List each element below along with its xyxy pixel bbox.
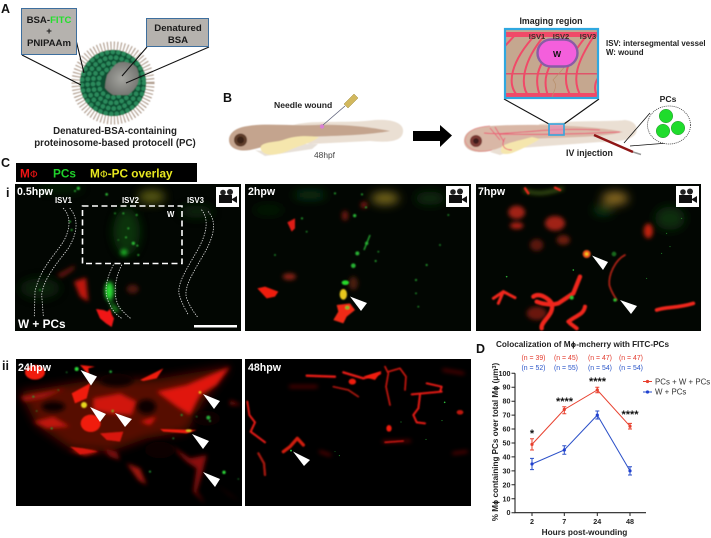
callout: Denatured BSA xyxy=(122,18,209,83)
axes: 10 xyxy=(502,494,510,503)
panel text: W + PCs xyxy=(18,317,66,331)
protocell sphere xyxy=(76,46,150,120)
imaging region box: W xyxy=(553,49,562,59)
panel: D line chart xyxy=(491,340,710,537)
callout: BSA-FITC + PNIPAAm: BSA-FITC xyxy=(27,15,71,26)
n counts: (n = 54) xyxy=(619,365,643,372)
caption: protocell: proteinosome-based protocell (PC) xyxy=(34,138,196,149)
axes: 7 xyxy=(562,517,566,526)
axes: 0 xyxy=(506,508,510,517)
panel: 24hpw micrograph xyxy=(16,359,242,506)
dashed imaging box xyxy=(82,206,182,264)
n counts: (n = 39) xyxy=(522,355,545,362)
imaging region heading: Imaging region xyxy=(519,16,583,26)
arrowheads xyxy=(80,370,220,487)
callout: BSA-FITC + PNIPAAm xyxy=(22,8,84,85)
panel: 7hpw micrograph xyxy=(476,184,701,331)
label C: C xyxy=(1,156,10,170)
icon: syringe xyxy=(594,135,641,154)
micrograph signal xyxy=(253,191,449,323)
imaging region box: ISV2 xyxy=(553,32,569,41)
axes: ) xyxy=(491,362,500,366)
axes: 100 xyxy=(498,369,510,378)
significance stars: **** xyxy=(556,396,574,408)
label B: B xyxy=(223,91,232,105)
label ii: ii xyxy=(2,359,9,373)
significance stars: **** xyxy=(621,409,639,421)
callout: BSA-FITC + PNIPAAm: PNIPAAm xyxy=(27,38,71,49)
axes: 48 xyxy=(626,517,634,526)
axes: 60 xyxy=(502,424,510,434)
significance stars: **** xyxy=(589,376,607,388)
arrowheads xyxy=(592,256,637,314)
micrograph signal xyxy=(247,367,467,475)
fish: injected larva xyxy=(464,120,637,155)
panel: B wound and injection schematic xyxy=(223,16,706,160)
callout: Denatured BSA: BSA xyxy=(168,35,188,46)
series: W + PCs xyxy=(530,411,632,475)
panel text: W xyxy=(167,210,175,219)
PCs magnified inset: PCs xyxy=(660,94,677,104)
legend: ISV and W: W: wound xyxy=(606,48,644,57)
n counts: (n = 55) xyxy=(554,365,578,372)
chart legend xyxy=(643,378,710,396)
imaging region box: ISV3 xyxy=(580,32,596,41)
panel: 48hpw micrograph xyxy=(245,359,471,506)
label D: D xyxy=(476,342,485,356)
timepoint text: 48hpw xyxy=(248,362,282,374)
axes: 2 xyxy=(530,517,534,526)
micrograph signal xyxy=(20,186,213,327)
callout: BSA-FITC + PNIPAAm: + xyxy=(46,26,52,37)
legend: ISV and W: ISV: intersegmental vessel xyxy=(606,39,706,48)
legend bar xyxy=(16,163,197,182)
needle wound text: Needle wound xyxy=(274,100,332,110)
dotted vessel outlines xyxy=(34,208,214,318)
caption: protocell: Denatured-BSA-containing xyxy=(53,126,177,137)
n counts: (n = 45) xyxy=(554,355,578,362)
arrowhead xyxy=(293,452,310,466)
significance stars: * xyxy=(530,428,535,440)
icon: needle xyxy=(320,94,358,129)
axes: 90 xyxy=(502,383,510,392)
timepoint text: 24hpw xyxy=(18,362,52,374)
micrograph signal xyxy=(20,365,242,503)
axes: 3 xyxy=(492,366,498,369)
imaging region box xyxy=(504,29,599,135)
PCs magnified inset xyxy=(624,94,690,146)
icon: video camera xyxy=(676,186,699,207)
chart legend: W + PCs xyxy=(655,388,686,396)
axes xyxy=(491,362,646,537)
axes: 24 xyxy=(593,517,601,526)
fish: 48hpf larva xyxy=(229,120,403,156)
n counts: (n = 47) xyxy=(619,355,643,362)
arrow xyxy=(413,125,452,147)
micrograph signal xyxy=(493,188,693,328)
significance stars xyxy=(530,376,639,440)
panel text: ISV3 xyxy=(187,196,205,205)
panel text: ISV1 xyxy=(55,196,73,205)
axes: 40 xyxy=(502,452,510,461)
label A: A xyxy=(1,2,10,16)
chart title: Colocalization of Mϕ-mcherry with FITC-PCs xyxy=(496,340,669,349)
axes: 50 xyxy=(502,438,510,448)
axes: 30 xyxy=(502,466,510,475)
48hpf text: 48hpf xyxy=(314,150,336,160)
timepoint text: 2hpw xyxy=(248,186,276,198)
axes: 20 xyxy=(502,480,510,489)
n counts: (n = 54) xyxy=(588,365,612,372)
icon: video camera xyxy=(446,186,469,207)
label i: i xyxy=(6,186,9,200)
imaging region box: ISV1 xyxy=(529,32,546,41)
timepoint text: 7hpw xyxy=(478,186,506,198)
panel: 0.5hpw micrograph xyxy=(15,184,241,331)
axes: 80 xyxy=(502,397,510,406)
IV injection text: IV injection xyxy=(566,148,613,158)
axes: Hours post-wounding xyxy=(542,527,627,537)
panel: A protocell schematic xyxy=(1,2,209,149)
n counts xyxy=(522,355,643,372)
chart legend: PCs + W + PCs xyxy=(655,378,710,386)
legend bar: PCs xyxy=(53,166,76,180)
n counts: (n = 47) xyxy=(588,355,612,362)
axes: % Mϕ containing PCs over total Mϕ (μm xyxy=(491,369,500,521)
panel: 2hpw micrograph xyxy=(245,184,471,331)
arrowhead xyxy=(350,296,367,311)
n counts: (n = 52) xyxy=(522,365,545,372)
icon: video camera xyxy=(216,187,239,207)
callout: Denatured BSA: Denatured xyxy=(154,23,202,34)
scale bar xyxy=(194,325,237,328)
axes: 70 xyxy=(502,411,510,420)
legend bar: MΦ xyxy=(20,166,38,180)
legend bar: MΦ-PC overlay xyxy=(90,166,173,180)
panel text xyxy=(17,186,205,331)
panel text: 0.5hpw xyxy=(17,186,54,198)
panel text: ISV2 xyxy=(122,196,140,205)
series: PCs + W + PCs xyxy=(530,387,632,450)
